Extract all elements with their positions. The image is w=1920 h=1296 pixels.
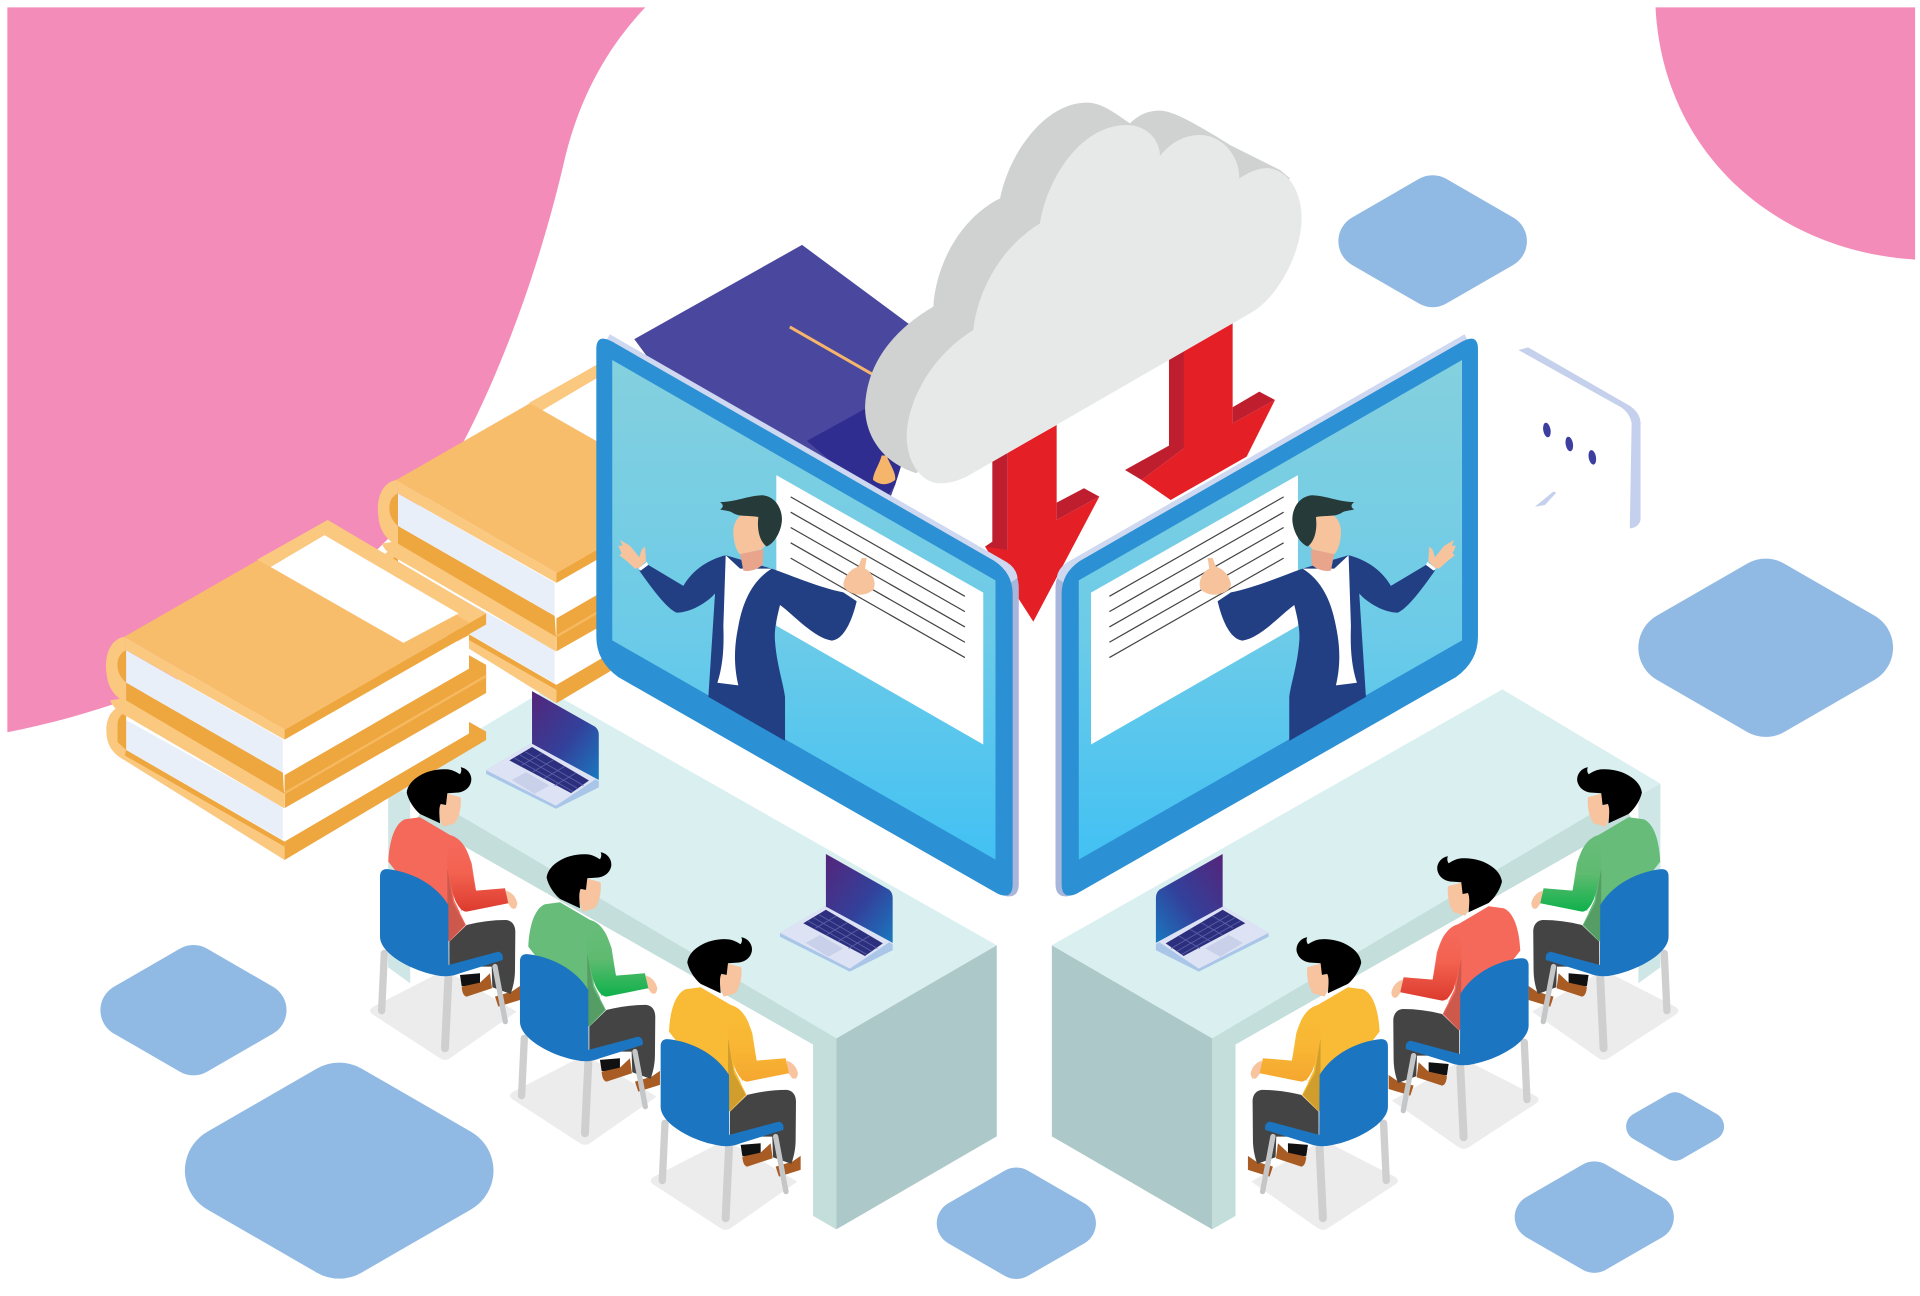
monitor: right with teacher bbox=[1056, 334, 1478, 896]
student: green sweater, right desk bbox=[1529, 767, 1679, 1060]
red arrow: right bbox=[1125, 323, 1275, 500]
laptop: right desk back bbox=[1156, 685, 1269, 803]
student: yellow sweater, left desk bbox=[651, 937, 801, 1230]
student: green sweater, left desk bbox=[510, 852, 660, 1145]
left desk bbox=[388, 689, 997, 1229]
graduation cap bbox=[634, 245, 967, 504]
laptop: left desk front bbox=[780, 854, 893, 972]
student: red sweater, left desk bbox=[370, 767, 520, 1060]
monitor: left with teacher bbox=[596, 334, 1019, 896]
blue tiles bbox=[127, 203, 1856, 1256]
laptop: left desk back bbox=[486, 691, 599, 809]
student: red sweater, right desk bbox=[1389, 856, 1539, 1149]
student: yellow sweater, right desk bbox=[1248, 937, 1398, 1230]
right desk bbox=[1052, 689, 1660, 1229]
books: back stack bbox=[378, 363, 758, 703]
red arrow: left bbox=[985, 425, 1099, 622]
pink blob: top left bbox=[7, 7, 645, 732]
books: front stack bbox=[106, 520, 486, 860]
laptop: right desk front bbox=[1156, 854, 1269, 972]
cloud bbox=[865, 103, 1302, 483]
pink blob: top right bbox=[1656, 7, 1915, 260]
speech bubble bbox=[1518, 347, 1641, 528]
